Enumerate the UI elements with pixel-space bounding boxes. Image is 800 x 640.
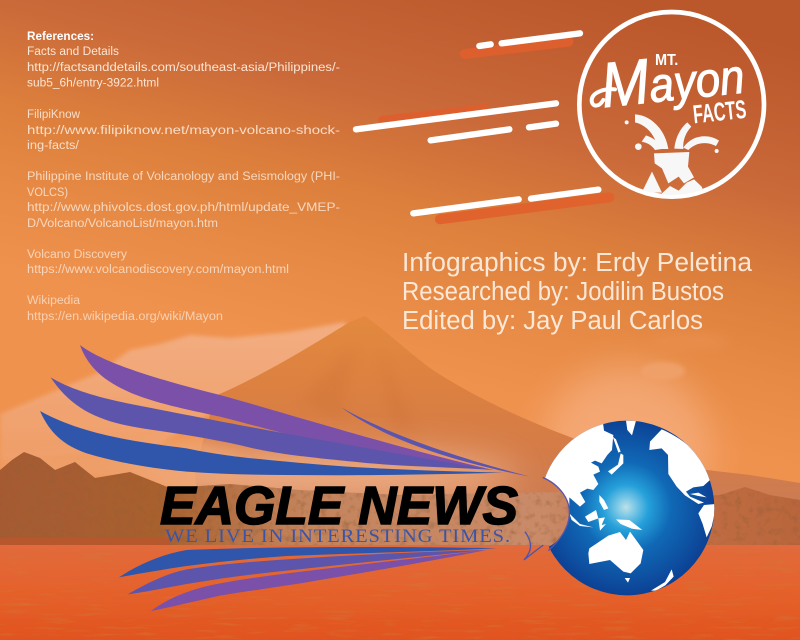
source: Wikipedia: Wikipedia: [27, 295, 81, 307]
credit: editor: Edited by: Jay Paul Carlos: [402, 307, 703, 335]
upper wing feathers: [40, 345, 530, 477]
source: Volcano Discovery: [27, 249, 289, 276]
logo: Mt. Mayon Facts badge: [579, 12, 764, 200]
icon: erupting volcano: [625, 114, 719, 200]
script title: Mayon: Mayon: [597, 37, 747, 121]
source: PHIVOLCS: [27, 171, 340, 230]
source: FilipiKnow: [27, 109, 340, 152]
source: Facts and Details: http://factsanddetails.com/southeast-asia/Philippines/-: [27, 62, 340, 74]
source: PHIVOLCS: Philippine Institute of Volcanology and Seismology (PHI-: [27, 171, 340, 183]
source: PHIVOLCS: http://www.phivolcs.dost.gov.ph/html/update_VMEP-: [27, 202, 340, 214]
source: PHIVOLCS: VOLCS): [27, 187, 68, 199]
references text block: [27, 31, 340, 323]
source: FilipiKnow: ing-facts/: [27, 140, 80, 152]
references heading: References:: [27, 31, 94, 43]
logo: Eagle News wings: [40, 345, 543, 611]
MT. label: MT.: [655, 52, 678, 69]
source: Facts and Details: [27, 46, 340, 90]
Eagle News tagline: WE LIVE IN INTERESTING TIMES.: [165, 527, 511, 547]
source: Facts and Details: sub5_6h/entry-3922.html: [27, 78, 159, 90]
FACTS label: FACTS: [691, 94, 748, 129]
Eagle News wordmark: EAGLE NEWS: [160, 476, 518, 536]
script swash on M: [592, 89, 615, 106]
background: tree line: [0, 452, 800, 546]
source: PHIVOLCS: D/Volcano/VolcanoList/mayon.htm: [27, 218, 218, 230]
continents: [537, 420, 717, 591]
wing swirl: [524, 532, 543, 560]
source: Wikipedia: https://en.wikipedia.org/wiki/Mayon: [27, 311, 223, 323]
background: Mayon volcano and clouds: [0, 316, 800, 548]
globe cut-out edge: [543, 477, 569, 551]
source: Volcano Discovery: Volcano Discovery: [27, 249, 127, 261]
lower wing feathers: [119, 547, 497, 611]
source: FilipiKnow: FilipiKnow: [27, 109, 81, 121]
credit: infographics: Infographics by: Erdy Peletina: [402, 249, 753, 277]
credit: research: Researched by: Jodilin Bustos: [402, 278, 724, 306]
credits: [402, 249, 753, 335]
globe ocean: [540, 421, 714, 595]
source: Volcano Discovery: https://www.volcanodiscovery.com/mayon.html: [27, 264, 289, 276]
source: Wikipedia: [27, 295, 223, 323]
source: FilipiKnow: http://www.filipiknow.net/mayon-volcano-shock-: [27, 125, 340, 137]
badge ring: [579, 12, 764, 197]
background: rice field: [0, 545, 800, 640]
speed lines: [356, 33, 609, 219]
source: Facts and Details: Facts and Details: [27, 46, 119, 58]
logo: globe: [537, 420, 717, 595]
